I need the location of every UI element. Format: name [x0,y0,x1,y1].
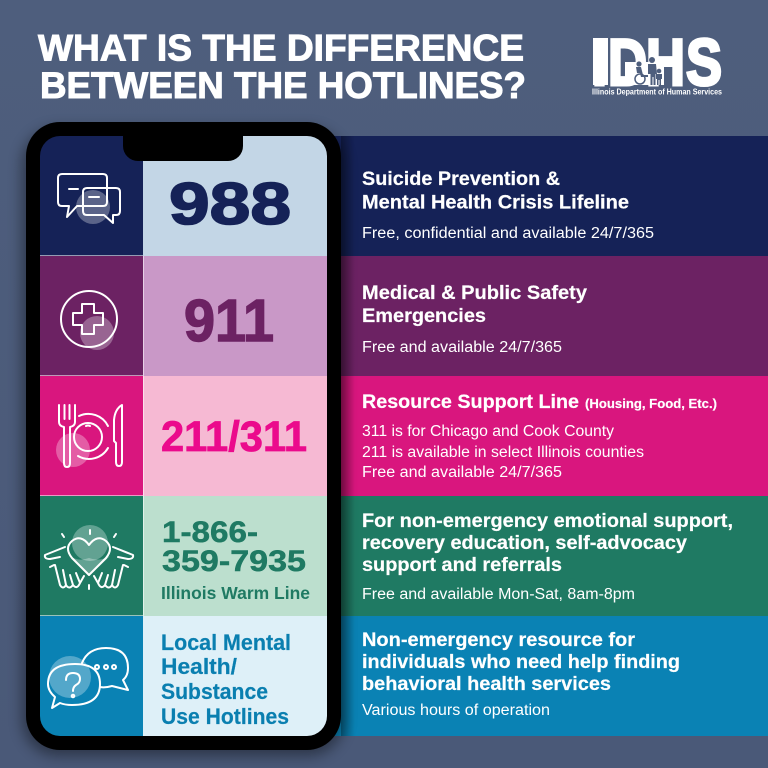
panel: band local hotlines description [330,616,768,736]
availability text: Free and available Mon-Sat, 8am-8pm [362,586,635,603]
heading: Medical & Public Safety [362,283,587,304]
details text [362,423,644,481]
heading: individuals who need help finding [362,652,680,673]
local hotlines label: Substance [161,679,268,704]
panel: band 988 description [330,136,768,256]
panel: band warm line description [330,496,768,616]
heading: recovery education, self-advocacy [362,533,687,554]
logo: IDHS: IDHS [592,26,722,99]
number: 911: 911 [184,288,274,354]
local hotlines label: Local Mental [161,630,291,655]
local hotlines label [161,630,291,729]
availability text: Free and available 24/7/365 [362,339,562,356]
number: warm line: 359-7935 [162,545,306,578]
screen rows [40,136,327,736]
heading [362,630,680,695]
icon: medical cross [61,291,117,350]
heading [362,392,717,413]
heading: behavioral health services [362,674,611,695]
heading: Suicide Prevention & [362,169,560,190]
number: warm line [161,516,310,603]
icon: chat bubbles [58,174,120,224]
panel: band 911 description [330,256,768,376]
availability text: Free, confidential and available 24/7/365 [362,225,654,242]
icon: plate and cutlery [56,405,122,467]
panel: band 211/311 description [330,376,768,496]
number: warm line: Illinois Warm Line [161,583,310,603]
phone [26,122,341,750]
local hotlines label: Use Hotlines [161,704,289,729]
local hotlines label: Health/ [161,654,238,679]
heading: (Housing, Food, Etc.) [585,396,717,411]
heading [362,511,733,576]
details text: 311 is for Chicago and Cook County [362,423,614,440]
heading: support and referrals [362,555,562,576]
title: BETWEEN THE HOTLINES? [40,65,526,106]
phone notch [123,134,243,161]
details text: Free and available 24/7/365 [362,464,562,481]
heading: Emergencies [362,306,486,327]
logo caption: Illinois Department of Human Services [592,86,722,96]
availability text: Various hours of operation [362,702,550,719]
number: 211/311: 211/311 [161,413,307,461]
icon: people in logo [635,57,662,85]
heading [362,169,629,214]
details text: 211 is available in select Illinois counties [362,444,644,461]
heading: For non-emergency emotional support, [362,511,733,532]
title: WHAT IS THE DIFFERENCE [38,28,524,68]
heading: Resource Support Line [362,392,579,413]
icon: heart in hands [45,525,133,589]
heading [362,283,587,327]
title [38,28,526,106]
number: 988: 988 [169,171,291,237]
icon: question and chat bubbles [48,648,128,708]
heading: Mental Health Crisis Lifeline [362,192,629,214]
heading: Non-emergency resource for [362,630,636,651]
number: warm line: 1-866- [162,516,258,549]
